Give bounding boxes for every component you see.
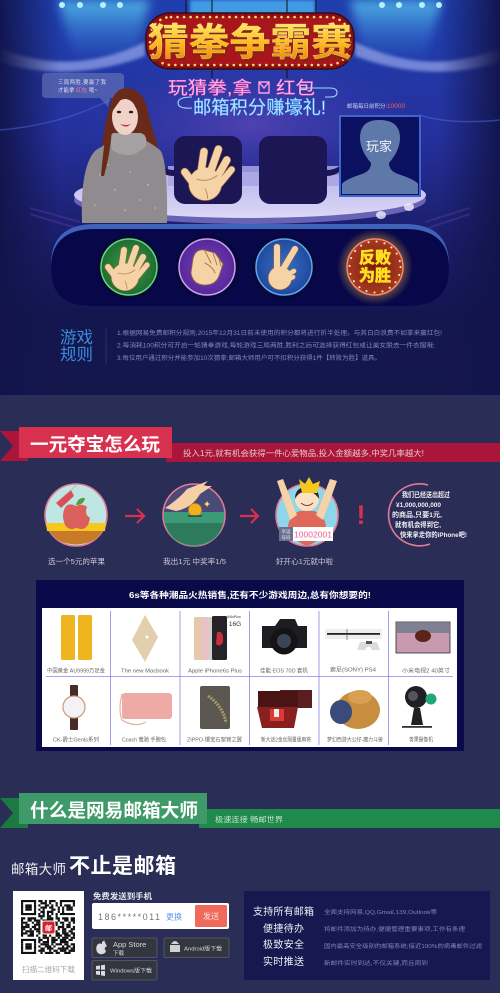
send to phone form: 186*****011 xyxy=(98,912,160,922)
features panel xyxy=(244,891,490,980)
stats callout: ¥1,000,000,000 xyxy=(396,502,441,509)
product: ps4: 索尼(SONY) PS4 xyxy=(330,666,376,674)
features panel: 极致安全 xyxy=(263,938,304,951)
step 3: winner: 10002001 xyxy=(294,530,332,540)
product: mahjong case: 新大话2金丝限量版麻将 xyxy=(261,736,311,744)
player hand box xyxy=(259,136,350,204)
button: paper xyxy=(97,235,161,299)
step 1: apple xyxy=(45,484,107,546)
product: watch: CK-爵士Gents系列 xyxy=(53,736,99,744)
product: tv: 小米电视2 40英寸 xyxy=(402,666,451,674)
QR code xyxy=(21,901,75,953)
product: camera: 佳能 EOS 70D 套机 xyxy=(260,666,308,674)
step 3: winner: 幸运 xyxy=(282,528,291,535)
stats callout: 的商品,只要1元, xyxy=(392,510,442,519)
features panel: 国内最高安全级别的邮箱系统;接近100%的病毒邮件过滤 xyxy=(324,942,482,950)
product: wallet: Coach 蔻驰 手腕包 xyxy=(122,736,166,744)
game rules text: 2.每消耗100积分可开启一轮猜拳游戏,每轮游戏三局两胜,胜利之后可选择获得红包或让美女脱去一件衣服哦; xyxy=(117,342,435,350)
product: macbook: The new Macbook xyxy=(121,668,169,674)
speech bubble: 才能拿 红包 哦~ xyxy=(58,86,97,94)
speech bubble xyxy=(42,73,124,107)
host woman xyxy=(82,88,167,223)
QR card xyxy=(13,891,84,980)
neon slogan xyxy=(168,78,337,118)
button: scissors xyxy=(252,235,316,299)
subheading: 邮箱大师不止是邮箱: 不止是邮箱 xyxy=(69,855,176,878)
product: iphone xyxy=(188,615,242,674)
hero section background xyxy=(0,0,500,395)
player avatar xyxy=(340,116,420,196)
app store button: App Store xyxy=(113,940,146,949)
app store button: 下载 xyxy=(113,949,125,957)
step 2: coin xyxy=(163,481,225,546)
subheading: 邮箱大师不止是邮箱 xyxy=(11,855,176,878)
windows button xyxy=(92,960,157,980)
product: iphone: 16G xyxy=(229,621,241,628)
arrow 2 xyxy=(240,509,258,523)
stats callout xyxy=(389,484,467,546)
app store button xyxy=(92,938,157,958)
step 3: winner: 号码 xyxy=(282,534,291,541)
send to phone form xyxy=(92,891,229,929)
product: smart camera: 青果摄像机 xyxy=(409,736,433,744)
product panel xyxy=(36,580,464,751)
step 3 caption: 好开心1元就中啦 xyxy=(276,556,334,566)
features panel: 实时推送 xyxy=(263,955,304,968)
step 3: winner xyxy=(276,477,338,546)
stats callout: 快来拿走你的iPhone吧! xyxy=(400,530,467,539)
button: rock xyxy=(175,235,239,299)
features panel: 全面支持网易,QQ,Gmail,139,Outlook等 xyxy=(324,908,437,916)
send to phone form: 免费发送到手机 xyxy=(93,891,152,901)
title: 猜拳争霸赛 marquee xyxy=(146,13,354,69)
product: ps4 xyxy=(325,629,382,674)
product: smart camera xyxy=(402,686,436,744)
product: plush hippo: 梦幻西游大公仔-魔力斗兽 xyxy=(327,736,383,744)
control panel xyxy=(51,224,449,306)
green ribbon heading xyxy=(0,793,500,828)
product: macbook xyxy=(121,615,169,674)
game rules text xyxy=(106,328,442,364)
product: iphone: Apple iPhone6s Plus xyxy=(188,668,242,674)
button: 反败为胜: 反败 xyxy=(359,249,391,267)
product panel title: 6s等各种潮品火热销售,还有不少游戏周边,总有你想要的! xyxy=(129,590,371,600)
exclamation mark: ! xyxy=(356,500,366,530)
neon slogan: 玩猜拳,拿 xyxy=(168,78,252,98)
game rules heading: 游戏 xyxy=(60,328,93,347)
product: gold bars xyxy=(47,615,105,674)
product: camera xyxy=(260,619,308,674)
QR card: 邮 xyxy=(45,924,52,932)
red ribbon heading: 一元夺宝怎么玩 xyxy=(30,434,160,455)
game rules heading: 规则 xyxy=(60,345,93,364)
subheading: 邮箱大师不止是邮箱: 邮箱大师 xyxy=(11,862,66,877)
game rules text: 1.根据网易免费邮积分规则,2015年12月31日前未使用的积分都将进行折半处理。与其白白浪费不如拿来赢红包! xyxy=(117,329,442,337)
button: 反败为胜: 为胜 xyxy=(359,267,391,285)
product: zippo: ZIPPO-镶宝石絮锦之翼 xyxy=(187,736,242,744)
arrow 1 xyxy=(125,509,144,523)
step 1 caption: 选一个5元的苹果 xyxy=(48,556,106,566)
player avatar: 玩家 xyxy=(366,139,392,154)
features panel: 便捷待办 xyxy=(263,922,304,935)
android button xyxy=(164,938,229,958)
title: 猜拳争霸赛 marquee: 猜拳争霸赛 xyxy=(148,22,352,64)
features panel: 新邮件实时到达,不仅关键,而且周到 xyxy=(324,959,428,967)
product: zippo xyxy=(187,686,242,744)
send to phone form: 更换 xyxy=(166,912,182,922)
stats callout: 就有机会得到它, xyxy=(395,520,441,529)
product: tv xyxy=(396,622,451,674)
product: iphone: 6/6sPlus xyxy=(227,615,241,619)
stage platform xyxy=(74,166,426,224)
game rules heading xyxy=(60,328,93,364)
features panel: 将邮件添加为待办,便捷管理重要事项,工作有条理 xyxy=(324,925,465,933)
game rules text: 3.每位用户通过积分并能参加10次猜拳;邮箱大师用户可不扣积分获得1件【转败为胜】道具。 xyxy=(117,354,381,362)
title: 猜拳争霸赛 marquee: 猜拳争霸赛 xyxy=(149,25,353,67)
step 2 caption: 我出1元 中奖率1/5 xyxy=(163,556,226,566)
windows button: Windows版下载 xyxy=(110,966,153,974)
product: wallet xyxy=(120,693,172,744)
stats callout: 我们已经送出超过 xyxy=(402,490,450,499)
red ribbon heading: 投入1元,就有机会获得一件心爱物品,投入金额越多,中奖几率越大! xyxy=(183,448,424,458)
product: mahjong case xyxy=(257,690,312,744)
player score: 邮箱每日前积分:10000 xyxy=(347,102,405,110)
green ribbon heading: 什么是网易邮箱大师 xyxy=(30,800,198,821)
section background lower xyxy=(0,395,500,993)
button: 反败为胜 xyxy=(337,229,413,305)
QR card: 扫描二维码下载 xyxy=(22,964,76,974)
opponent hand box with open hand xyxy=(150,136,242,204)
speech bubble: 三局两胜,要赢了我 xyxy=(58,78,106,86)
product: plush hippo xyxy=(327,690,383,744)
neon slogan: 邮箱积分赚壕礼! xyxy=(193,97,326,118)
product: gold bars: 中国黄金 AU9999万足金 xyxy=(47,666,105,674)
features panel: 支持所有邮箱 xyxy=(253,905,314,918)
neon slogan: 红包 xyxy=(276,78,315,98)
red ribbon heading xyxy=(0,427,500,462)
green ribbon heading: 极速连接 畅邮世界 xyxy=(215,814,284,824)
product: watch xyxy=(53,685,99,744)
android button: Android版下载 xyxy=(184,944,223,952)
send to phone form: 发送 xyxy=(203,911,219,921)
